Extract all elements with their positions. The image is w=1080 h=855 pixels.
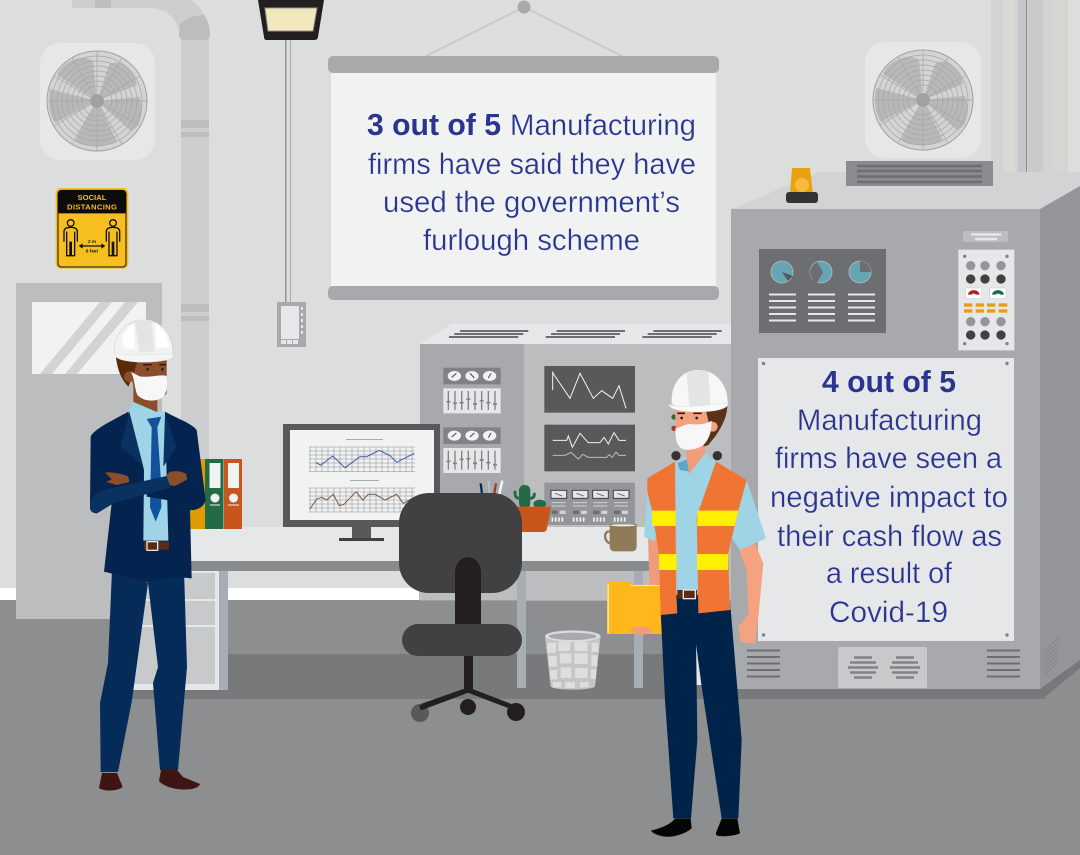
- large machine: [700, 161, 1080, 697]
- cash flow statistic text: Manufacturing: [797, 404, 982, 437]
- yellow folder: [607, 582, 662, 635]
- cash flow statistic text: their cash flow as: [777, 520, 1002, 553]
- worker's orange safety vest: [647, 462, 747, 615]
- knob panel: [958, 250, 1014, 350]
- monitor chart grids: [309, 447, 415, 512]
- furlough statistic text: used the government’s: [383, 186, 680, 219]
- baseboard: [0, 588, 1080, 600]
- console line charts: [544, 366, 635, 471]
- office desk: [132, 527, 702, 690]
- worker's belt: [677, 590, 697, 599]
- manager in suit: [90, 320, 206, 791]
- worker with safety vest: [607, 370, 766, 837]
- cash flow statistic text: firms have seen a: [775, 442, 1002, 475]
- cash flow statistic text: a result of: [826, 557, 953, 590]
- amber beacon: [786, 168, 818, 203]
- worker's head with mask and hard hat: [668, 370, 728, 450]
- cash flow statistic text: 4 out of 5: [822, 364, 956, 399]
- right wall columns: [991, 0, 1068, 175]
- manager neck and shirt: [128, 383, 168, 541]
- social distancing sign: 6 feet: [86, 248, 99, 253]
- furlough statistic text: furlough scheme: [423, 224, 640, 257]
- manager trousers: [100, 570, 187, 772]
- roof vent: [846, 161, 993, 186]
- worker shoes: [651, 819, 740, 837]
- social distancing sign: SOCIAL: [78, 193, 107, 202]
- computer monitor with charts: [283, 424, 440, 541]
- waste bin: [545, 630, 601, 690]
- dial and slider panels: [443, 368, 501, 473]
- cactus plant: [514, 485, 551, 532]
- manager head with mask and hard hat: [114, 320, 173, 401]
- manager belt: [144, 542, 169, 550]
- binders: [189, 459, 242, 529]
- office chair: [399, 493, 525, 722]
- manager shoes: [99, 770, 200, 791]
- wall fan left: [40, 43, 155, 160]
- console meter panel: [544, 483, 635, 525]
- machine plate: cash flow statistic: [758, 358, 1014, 641]
- worker trousers: [661, 595, 742, 818]
- pen pot: [481, 481, 502, 495]
- lower wall behind desk strip: [419, 571, 731, 600]
- ceiling lamp: [258, 0, 324, 302]
- cash flow statistic text: [770, 364, 1008, 629]
- control knobs beside worker's head: [671, 414, 677, 431]
- back control console: [420, 324, 735, 601]
- social distancing sign: [56, 188, 128, 269]
- door: [16, 283, 162, 619]
- coffee mug: [605, 524, 637, 551]
- manager crossed arms: [90, 471, 197, 513]
- wall fan right: [865, 42, 981, 158]
- floor: [0, 600, 1080, 855]
- machine label slot: [963, 231, 1008, 242]
- ceiling duct pipe: [72, 0, 210, 600]
- cash flow statistic text: Covid-19: [829, 596, 948, 629]
- desk drawer unit: [132, 570, 220, 690]
- hanging banner: furlough statistic: [328, 0, 719, 300]
- worker's shirt and sleeves: [644, 453, 766, 590]
- wall switch box: [277, 302, 306, 347]
- furlough statistic text: firms have said they have: [368, 148, 696, 181]
- worker's neck and ear loops: [671, 443, 722, 474]
- machine louvres and speaker grille: [747, 638, 1059, 688]
- worker's bare right arm: [738, 543, 763, 643]
- furlough statistic text: [367, 107, 696, 257]
- furlough statistic text: 3 out of 5: [367, 107, 501, 142]
- manager tie: [147, 417, 161, 522]
- background wall: [0, 0, 1080, 600]
- manager jacket: [90, 412, 206, 582]
- gauge display panel: [759, 249, 886, 333]
- social distancing sign: 2 m: [88, 239, 96, 244]
- furlough statistic text: Manufacturing: [510, 109, 696, 142]
- social distancing sign: DISTANCING: [67, 202, 117, 211]
- worker's left arm behind folder: [648, 535, 664, 610]
- cash flow statistic text: negative impact to: [770, 481, 1008, 514]
